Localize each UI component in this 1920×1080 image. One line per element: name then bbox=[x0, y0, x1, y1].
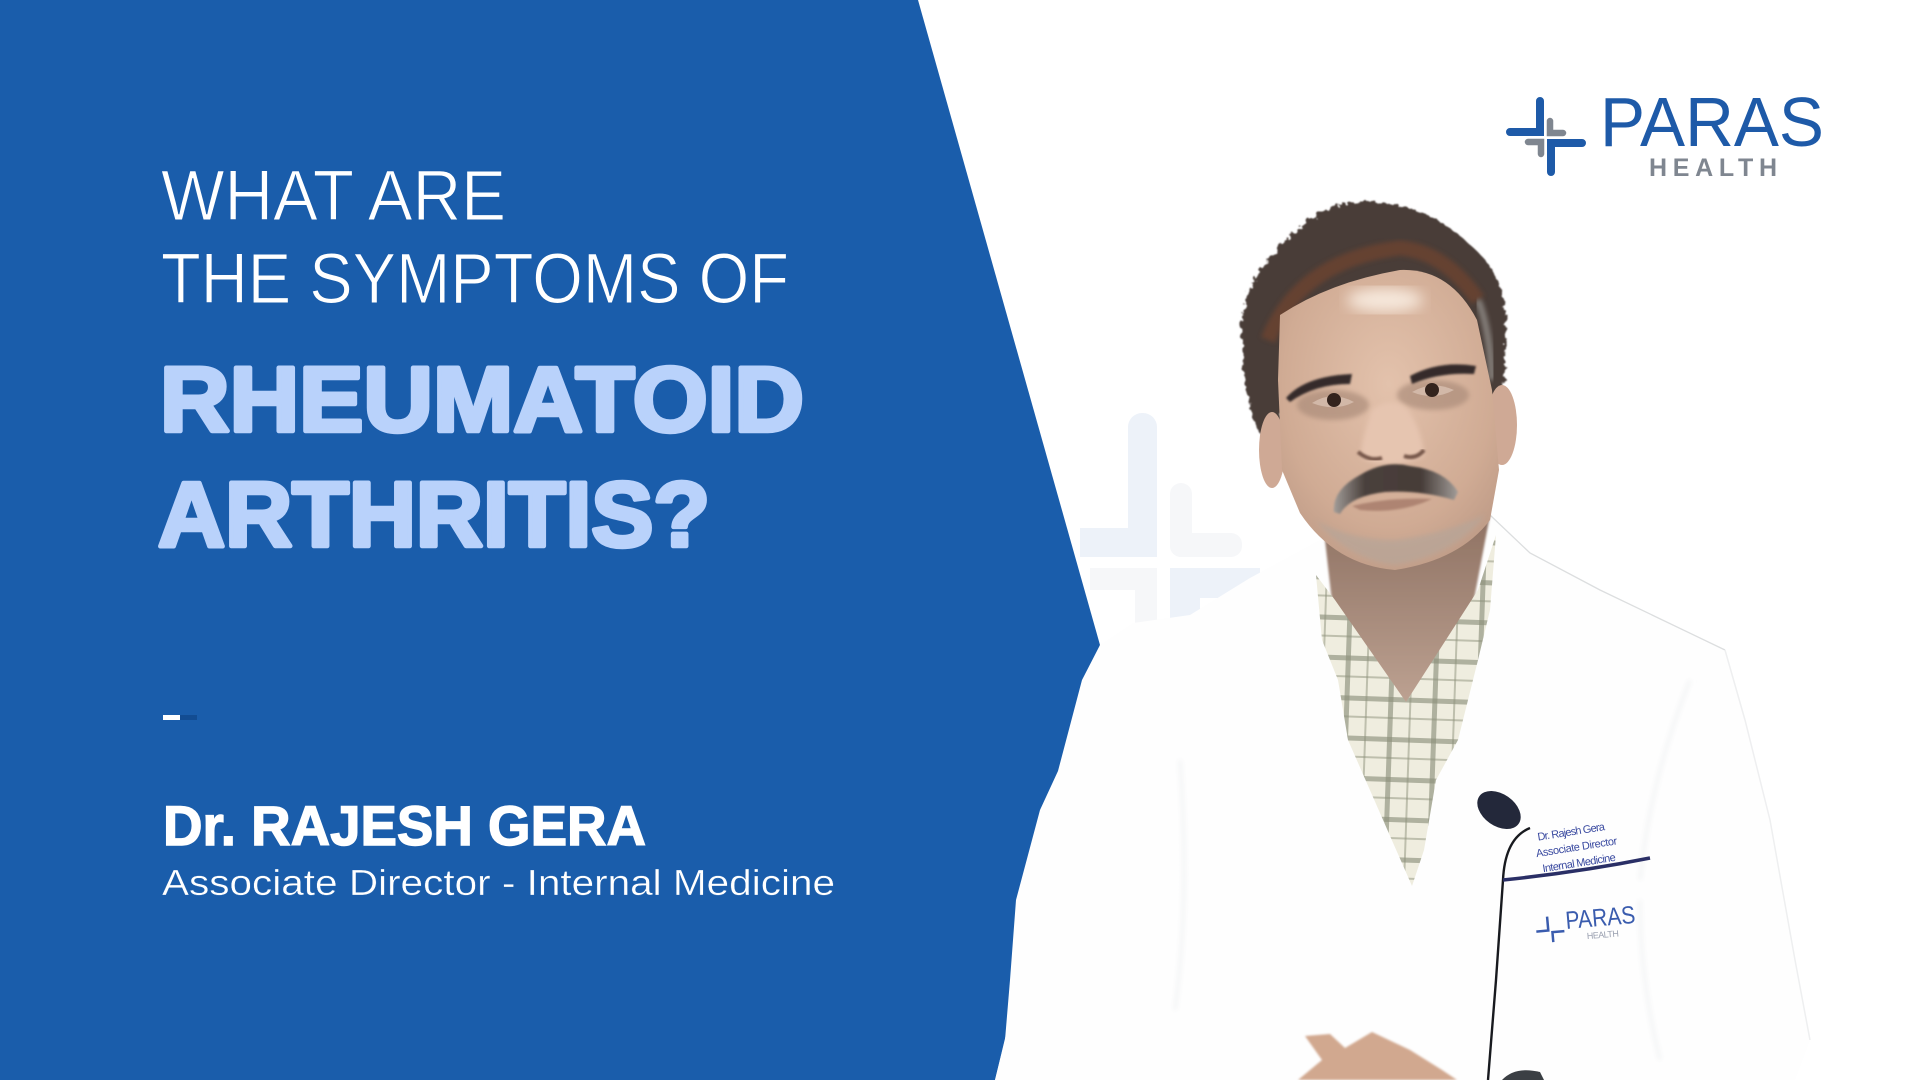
nose bbox=[1358, 402, 1424, 465]
badge text on coat pocket: Associate Director bbox=[1535, 835, 1618, 860]
neck bbox=[1325, 515, 1490, 705]
badge text on coat pocket: Dr. Rajesh Gera bbox=[1537, 821, 1607, 844]
hair highlights bbox=[1268, 248, 1478, 340]
panel: blue angled background bbox=[0, 0, 1100, 1080]
forehead highlight bbox=[1347, 288, 1423, 312]
mustache bbox=[1334, 464, 1458, 514]
hands bbox=[1298, 1032, 1457, 1080]
mouth bbox=[1352, 499, 1432, 511]
illustration: doctor bbox=[995, 201, 1810, 1080]
eyes bbox=[1312, 383, 1454, 407]
hair bbox=[1242, 201, 1506, 450]
lab coat bbox=[995, 515, 1810, 1080]
logo wordmark: PARAS bbox=[1600, 83, 1824, 161]
pocket line bbox=[1503, 858, 1650, 880]
badge text on coat pocket: Internal Medicine bbox=[1542, 852, 1617, 875]
title: condition name: RHEUMATOID bbox=[160, 349, 804, 451]
eyebrows bbox=[1286, 364, 1476, 402]
icon: watermark cross behind doctor bbox=[1080, 413, 1260, 638]
microphone bbox=[1470, 783, 1528, 837]
divider dash bbox=[163, 715, 197, 720]
chin stubble shading bbox=[1315, 515, 1485, 565]
badge text on coat pocket bbox=[1533, 820, 1621, 876]
watch bbox=[1502, 1070, 1544, 1080]
logo: Paras Health bbox=[1510, 83, 1824, 182]
title: intro question bbox=[161, 157, 789, 319]
pocket logo: PARAS bbox=[1564, 901, 1636, 935]
text block: doctor name and role bbox=[162, 794, 835, 903]
title: intro question: THE SYMPTOMS OF bbox=[161, 240, 789, 319]
microphone wire bbox=[1488, 828, 1530, 1080]
left ear bbox=[1259, 412, 1285, 488]
grey temple bbox=[1478, 300, 1492, 380]
plaid shirt bbox=[1316, 535, 1496, 886]
eye sockets bbox=[1297, 380, 1469, 420]
pocket logo bbox=[1534, 901, 1637, 946]
face bbox=[1278, 270, 1499, 570]
title: condition name: ARTHRITIS? bbox=[158, 464, 710, 566]
text block: doctor name and role: Associate Director - Internal Medicine bbox=[162, 862, 835, 903]
text block: doctor name and role: Dr. RAJESH GERA bbox=[163, 794, 646, 857]
right ear bbox=[1487, 385, 1517, 465]
logo subtitle: HEALTH bbox=[1649, 154, 1777, 182]
title: condition name bbox=[158, 349, 804, 566]
title: intro question: WHAT ARE bbox=[161, 157, 506, 236]
pocket logo: HEALTH bbox=[1586, 928, 1619, 941]
icon: logo cross bbox=[1510, 101, 1582, 172]
